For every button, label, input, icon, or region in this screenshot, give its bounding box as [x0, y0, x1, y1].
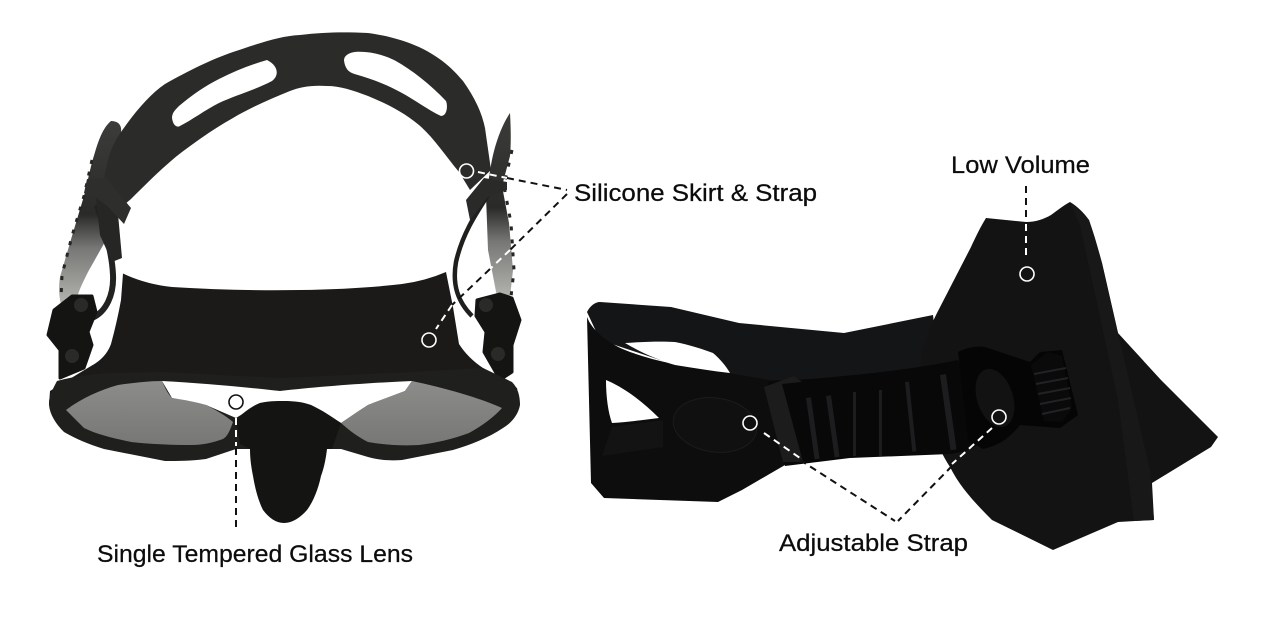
callout: silicone skirt and strap: [422, 164, 817, 347]
nose pocket: [236, 401, 341, 523]
front view mask: [48, 32, 520, 523]
leader lines: [436, 172, 567, 329]
glossy inner panel: [602, 420, 663, 456]
rear strap inner: [587, 302, 940, 395]
right strap loop: [455, 195, 488, 316]
skirt side: [920, 202, 1218, 550]
strap outer body: [587, 317, 800, 502]
buckle: [958, 347, 1078, 449]
label: Low Volume: [951, 152, 1090, 179]
right clip ridges: [504, 150, 514, 297]
strap ribs: [806, 374, 957, 459]
left strap ribbed tail: [96, 198, 122, 262]
right lens: [341, 381, 502, 445]
label: Single Tempered Glass Lens: [97, 541, 413, 568]
marker: [992, 410, 1006, 424]
leader lines: [764, 428, 992, 521]
strap keeper: [764, 376, 803, 462]
callout: single tempered glass lens: [97, 395, 413, 568]
right side clip: [486, 113, 513, 302]
left hinge buckle: [48, 296, 96, 378]
marker: [460, 164, 474, 178]
left clip ridges: [61, 160, 92, 300]
right strap keepers: [466, 178, 507, 220]
marker: [743, 416, 757, 430]
head strap: [104, 32, 491, 210]
buckle wheel: [1031, 352, 1072, 422]
callout: low volume: [951, 152, 1090, 281]
marker: [229, 395, 243, 409]
leader line: [235, 418, 237, 530]
left lens: [66, 381, 233, 445]
skirt frame edge: [1070, 202, 1154, 521]
callout: adjustable strap: [743, 410, 1006, 557]
lens frame: [49, 368, 520, 461]
label: Silicone Skirt & Strap: [574, 180, 817, 207]
left strap keepers: [84, 178, 131, 224]
marker: [422, 333, 436, 347]
silicone skirt: [49, 272, 520, 420]
strap window: [606, 380, 659, 423]
right hinge buckle: [476, 294, 520, 380]
wheel ridges: [1034, 368, 1071, 414]
rear strap white gap: [625, 342, 730, 373]
left strap loop: [92, 205, 113, 318]
side view mask: [587, 202, 1218, 550]
marker: [1020, 267, 1034, 281]
leader line: [1025, 186, 1027, 258]
oval strap hinge: [670, 392, 760, 458]
left side clip: [59, 121, 121, 308]
adjustable strap band: [768, 360, 985, 466]
label: Adjustable Strap: [779, 530, 968, 557]
gap under skirt: [162, 381, 412, 423]
buckle swivel: [969, 364, 1021, 432]
